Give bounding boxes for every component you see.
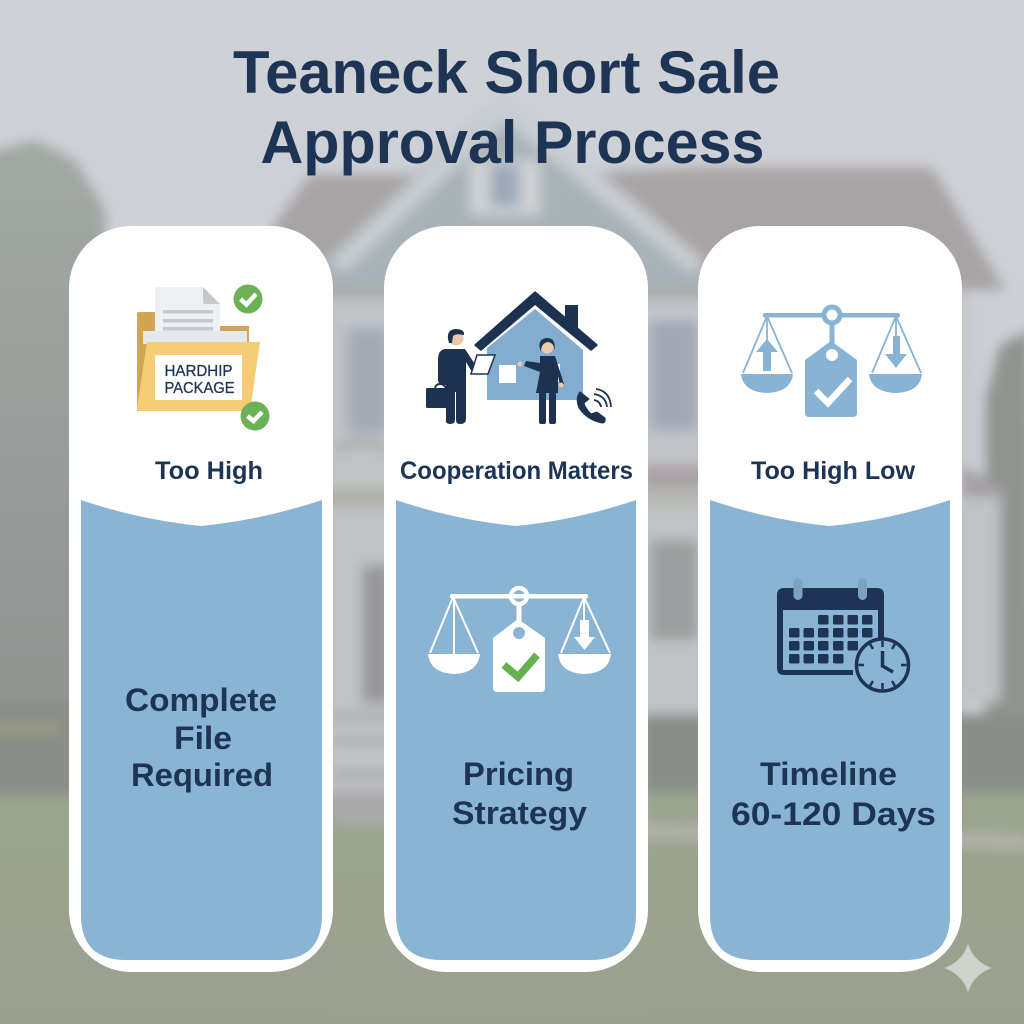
heading: Too High: Too High (155, 457, 263, 485)
clock (856, 639, 908, 691)
text: pricing strategy: Strategy (452, 795, 587, 831)
trees (0, 140, 110, 800)
text: timeline: 60-120 Days (731, 796, 936, 832)
owner figure (518, 338, 564, 424)
panel: cooperation matters (384, 226, 648, 972)
title: Approval Process (260, 109, 764, 176)
upper bands (300, 287, 720, 297)
folder label: PACKAGE (164, 380, 234, 397)
icon: house with agent and owner (426, 292, 611, 424)
inner panel (81, 500, 322, 960)
text: timeline (731, 756, 936, 832)
icon: sparkle (944, 944, 992, 992)
icon: calendar with clock (777, 578, 908, 691)
mid bands (640, 465, 710, 489)
title (233, 39, 780, 176)
roof (272, 168, 1005, 290)
text: pricing strategy (452, 756, 587, 831)
text: complete file required (125, 682, 277, 793)
icon: hardship folder with checks (137, 284, 270, 430)
title: Teaneck Short Sale (233, 39, 780, 106)
icon: blue scale with price tag (741, 307, 922, 417)
text: pricing strategy: Pricing (463, 756, 574, 792)
hedges (0, 702, 80, 794)
windows (347, 328, 389, 433)
agent figure (426, 329, 495, 424)
icon: phone (577, 389, 611, 423)
inner panel (396, 500, 636, 960)
heading: too high low: Too High Low (751, 457, 916, 485)
text: complete file required: File (174, 720, 232, 756)
icon: white scale with price tag (428, 588, 611, 692)
folder label: HARDHIP (164, 363, 232, 380)
text: complete file required: Complete (125, 682, 277, 718)
text: complete file required: Required (131, 757, 273, 793)
gable (300, 92, 720, 300)
text: timeline: Timeline (760, 756, 897, 792)
lawn (0, 795, 330, 1024)
panel: price range (698, 226, 962, 972)
panel: hardship package (69, 226, 333, 972)
folder label (164, 363, 234, 397)
steps (330, 790, 400, 830)
inner panel (710, 500, 950, 960)
heading: cooperation matters: Cooperation Matters (400, 457, 633, 485)
house wall (300, 270, 965, 800)
